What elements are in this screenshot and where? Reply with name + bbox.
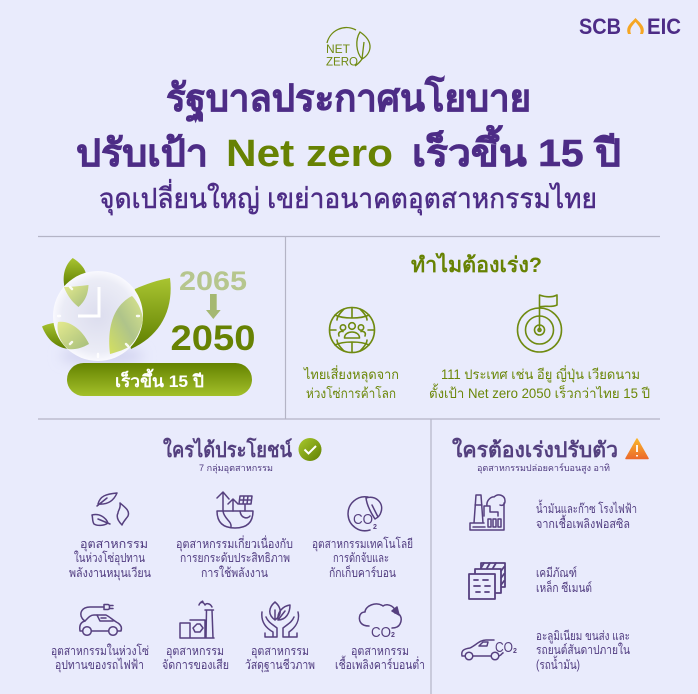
item: carbon capture	[312, 497, 413, 580]
item: aluminium transport ICE cars: รถยนต์สันดาปภายใน	[536, 643, 630, 657]
item: low carbon fuel: 2	[391, 632, 395, 639]
item: aluminium transport ICE cars: 2	[513, 648, 517, 655]
logo: SCB EIC: EIC	[647, 14, 681, 39]
heading: why hurry: ทำไมต้องเร่ง?	[411, 252, 542, 277]
item: low carbon fuel: เชื้อเพลิงคาร์บอนต่ำ	[335, 655, 425, 672]
item: chemicals steel cement	[469, 563, 592, 599]
item: energy efficiency: การยกระดับประสิทธิภาพ	[180, 551, 290, 565]
item: EV supply chain: อุปทานของรถไฟฟ้า	[55, 658, 144, 673]
clock with leaves illustration	[42, 258, 171, 365]
item: aluminium transport ICE cars: (รถน้ำมัน)	[536, 655, 580, 672]
item: low carbon fuel: อุตสาหกรรม	[351, 644, 409, 659]
item: carbon capture: CO	[353, 511, 373, 528]
text: 111 countries: 111 ประเทศ เช่น อียู ญี่ปุ่น เวียดนาม	[441, 365, 640, 383]
item: energy efficiency	[176, 492, 293, 580]
item: chemicals steel cement: เคมีภัณฑ์	[536, 566, 577, 580]
item: waste management	[162, 601, 229, 672]
text: risk falling out of global supply chain: ไทยเสี่ยงหลุดจาก	[303, 365, 399, 383]
item: bio-based materials	[245, 602, 315, 673]
item: waste management: อุตสาหกรรม	[166, 644, 224, 659]
item: bio-based materials: อุตสาหกรรม	[251, 644, 309, 659]
item: chemicals steel cement: เหล็ก ซีเมนต์	[536, 580, 592, 595]
item: carbon capture: อุตสาหกรรมเทคโนโลยี	[312, 536, 413, 552]
heading: who must adapt: ใครต้องเร่งปรับตัว	[452, 437, 618, 462]
title: รัฐบาลประกาศนโยบาย	[166, 75, 531, 123]
subtitle: จุดเปลี่ยนใหญ่ เขย่าอนาคตอุตสาหกรรมไทย	[99, 179, 597, 216]
title	[76, 75, 621, 175]
panel: who must adapt	[452, 437, 648, 672]
logo: SCB EIC: SCB	[579, 14, 621, 39]
title: ปรับเป้า	[76, 133, 208, 175]
item: aluminium transport ICE cars	[462, 629, 630, 672]
item: oil gas power: น้ำมันและก๊าซ โรงไฟฟ้า	[536, 499, 637, 516]
item: bio-based materials: วัสดุฐานชีวภาพ	[245, 658, 315, 673]
title: เร็วขึ้น 15 ปี	[412, 125, 621, 175]
text: high emitting industries: อุตสาหกรรมปล่อยคาร์บอนสูง อาทิ	[477, 462, 610, 474]
item: energy efficiency: การใช้พลังงาน	[201, 566, 268, 580]
years 2065 to 2050: 2050	[170, 319, 256, 358]
icon: warning triangle	[626, 439, 648, 458]
item: EV supply chain: อุตสาหกรรมในห่วงโซ่	[51, 643, 149, 659]
pill: faster by 15 years: เร็วขึ้น 15 ปี	[115, 368, 204, 391]
item: renewable supply chain: อุตสาหกรรม	[80, 537, 148, 552]
item: aluminium transport ICE cars: อะลูมิเนียม ขนส่ง และ	[536, 629, 630, 644]
heading: who benefits: ใครได้ประโยชน์	[163, 437, 293, 462]
icon: net zero badge: ZERO	[326, 56, 358, 68]
item: carbon capture: 2	[373, 524, 377, 531]
item: energy efficiency: อุตสาหกรรมเกี่ยวเนื่องกับ	[176, 535, 293, 552]
icon: check badge	[298, 438, 322, 461]
item: aluminium transport ICE cars: CO	[495, 639, 513, 656]
item: oil gas power	[470, 495, 637, 531]
years 2065 to 2050	[170, 266, 256, 358]
section dividers	[38, 236, 660, 694]
item: low carbon fuel	[335, 604, 425, 672]
icon: target with flag	[518, 295, 562, 352]
item: renewable supply chain: พลังงานหมุนเวียน	[69, 566, 151, 581]
item: waste management: จัดการของเสีย	[162, 658, 229, 672]
text: 111 countries: ตั้งเป้า Net zero 2050 เร็วกว่าไทย 15 ปี	[429, 383, 650, 401]
icon: globe with people	[330, 308, 374, 352]
text: risk falling out of global supply chain	[303, 365, 399, 401]
panel: who benefits	[51, 437, 425, 673]
item: renewable supply chain: ในห่วงโซ่อุปทาน	[74, 550, 145, 566]
icon: net zero badge	[326, 28, 370, 68]
text: 111 countries	[429, 365, 650, 401]
item: oil gas power: จากเชื้อเพลิงฟอสซิล	[536, 514, 630, 531]
icon: net zero badge: NET	[326, 44, 350, 56]
title: Net zero	[226, 133, 393, 175]
years 2065 to 2050: 2065	[179, 266, 247, 296]
item: low carbon fuel: CO	[371, 624, 391, 641]
text: seven industry groups: 7 กลุ่มอุตสาหกรรม	[199, 463, 273, 474]
text: risk falling out of global supply chain: ห่วงโซ่การค้าโลก	[306, 385, 396, 401]
item: renewable supply chain	[69, 493, 151, 581]
item: carbon capture: การดักจับและ	[333, 551, 389, 565]
logo: SCB EIC	[579, 14, 681, 39]
pill: faster by 15 years	[67, 363, 252, 396]
item: EV supply chain	[51, 604, 149, 673]
item: carbon capture: กักเก็บคาร์บอน	[329, 565, 396, 580]
